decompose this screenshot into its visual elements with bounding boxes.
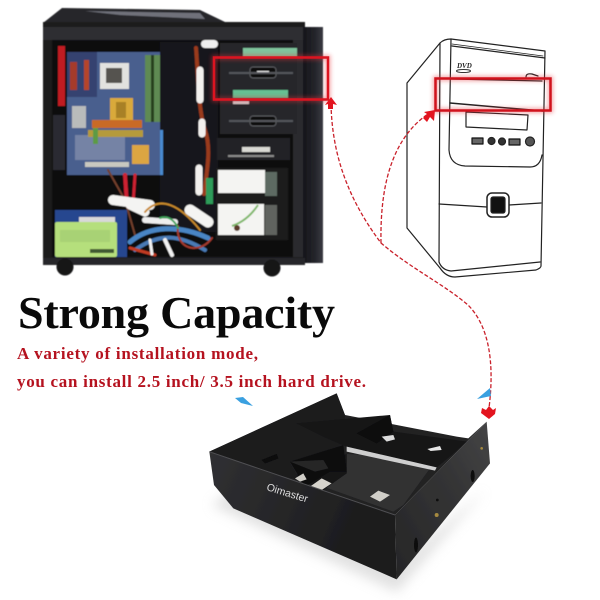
left floor panel (209, 393, 345, 480)
line drawing: PC tower (407, 39, 545, 277)
motherboard (67, 52, 160, 175)
product: drive bay bracket (209, 393, 490, 592)
slots (295, 473, 307, 482)
front ports (472, 137, 534, 146)
arrowhead: tower (423, 110, 435, 122)
drive bays (220, 43, 297, 134)
case body (43, 22, 305, 265)
red highlight box on tower (436, 78, 550, 110)
front face (209, 452, 397, 579)
dashed connector arrows (331, 104, 491, 408)
right side face (395, 422, 490, 579)
subtitle (17, 344, 366, 391)
red highlight box on case (214, 58, 328, 100)
display window (466, 112, 528, 130)
photo: open PC case interior (43, 8, 323, 276)
tray floor (209, 393, 487, 515)
title: Strong Capacity (18, 287, 335, 338)
rear IO ports (53, 115, 65, 170)
cables (108, 44, 214, 255)
subtitle: A variety of installation mode, (17, 344, 258, 363)
power button (487, 193, 509, 217)
upper rail (297, 415, 467, 467)
case top vent (43, 8, 225, 23)
arrowhead: case (325, 97, 337, 109)
case feet (56, 258, 74, 276)
soft shadow (212, 490, 485, 592)
subtitle: you can install 2.5 inch/ 3.5 inch hard drive. (17, 372, 366, 391)
tower outline (407, 39, 545, 277)
DVD logo: DVD (456, 62, 472, 70)
red fan (58, 46, 65, 106)
center floor plate (323, 454, 430, 512)
optical tray button (526, 74, 538, 77)
case side panel (303, 27, 323, 263)
brand label: Oimaster (265, 481, 310, 505)
blue arrow marks (235, 388, 491, 406)
case interior (52, 40, 293, 257)
power supply (55, 210, 127, 257)
upright clips (357, 415, 393, 443)
arrowhead: bracket (481, 406, 496, 419)
hard drive cages (216, 168, 288, 240)
